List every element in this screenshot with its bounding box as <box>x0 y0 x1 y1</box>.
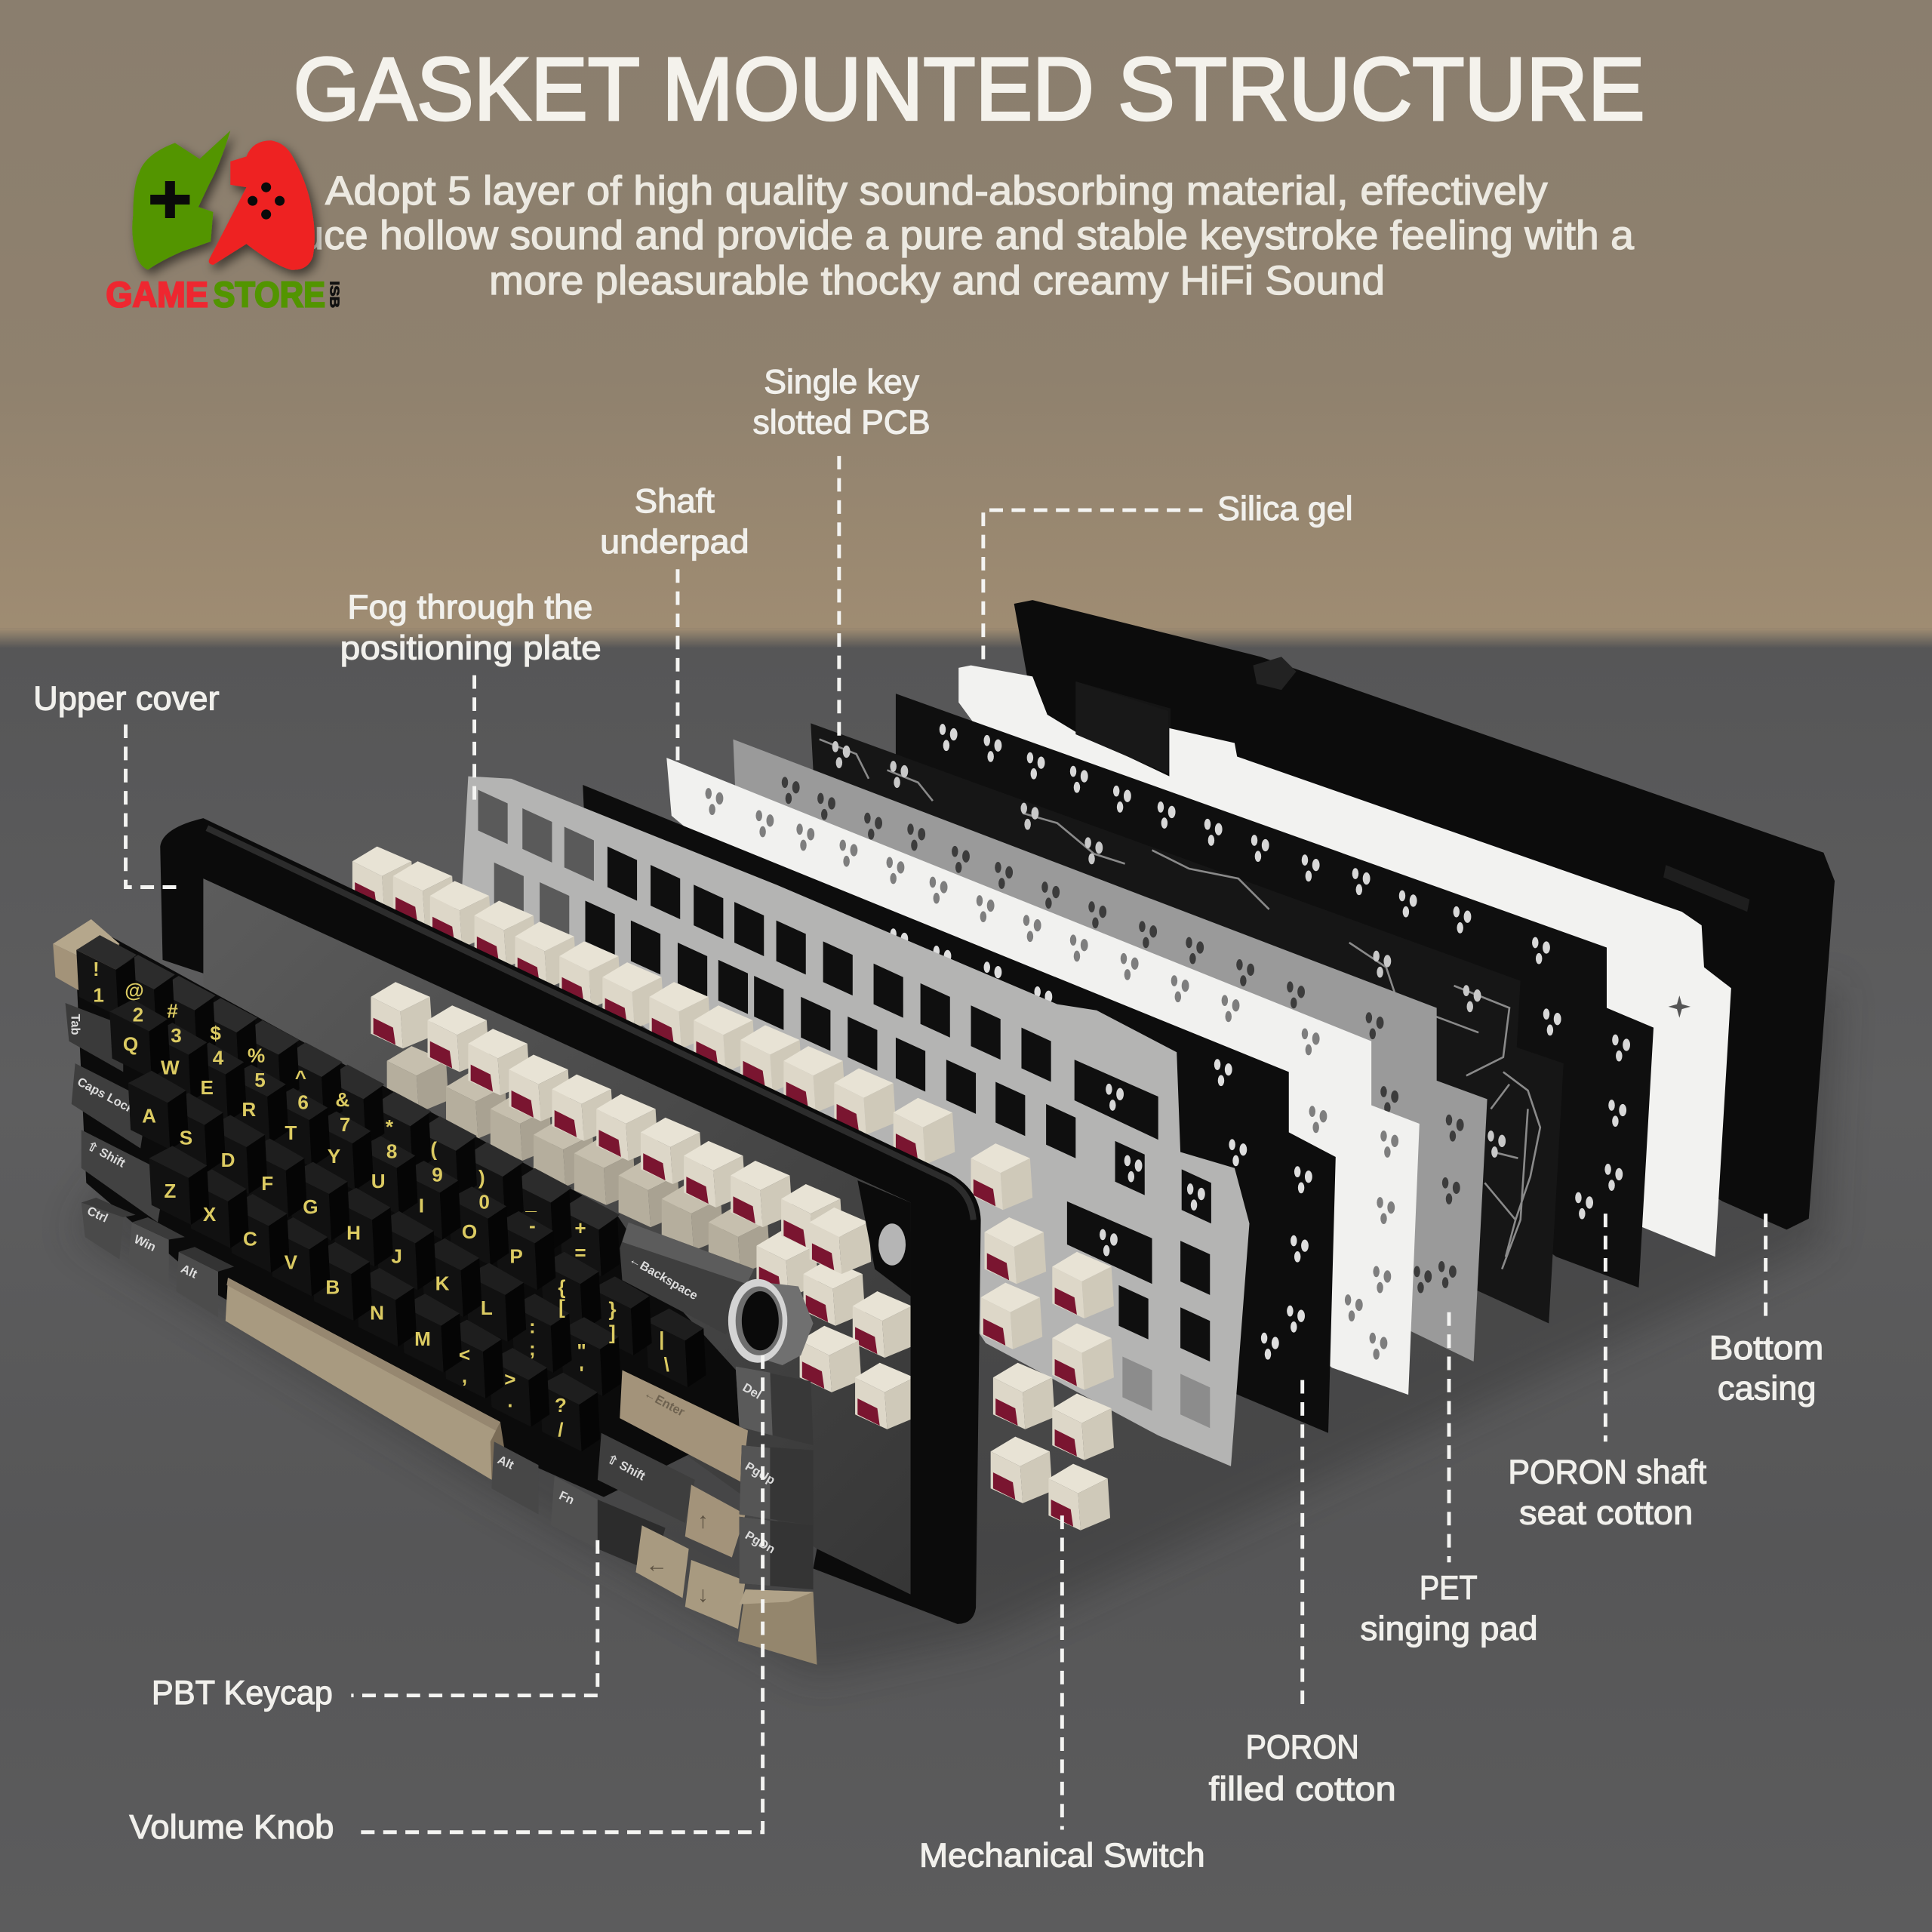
keycap legends: O <box>462 1220 477 1243</box>
keycap legends: 3 <box>171 1024 182 1047</box>
key: Caps Lock <box>72 1063 148 1149</box>
label: PORON filled cotton: PORON <box>1246 1729 1359 1766</box>
key: arrow left <box>635 1525 689 1598</box>
key: arrow up <box>685 1484 746 1558</box>
keycap legends: B <box>325 1275 340 1298</box>
key: Ctrl: Ctrl <box>85 1204 110 1226</box>
label: Single key slotted PCB: Single key <box>764 364 919 401</box>
keycap legends: 6 <box>297 1091 309 1113</box>
silica gel mark <box>1669 995 1690 1018</box>
upper cover see-through opening <box>203 878 911 1595</box>
label: Fog through the positioning plate: Fog through the <box>347 589 592 626</box>
label: PORON shaft seat cotton <box>1508 1214 1706 1532</box>
keycap legends: C <box>243 1228 257 1251</box>
keycap legends: H <box>346 1221 361 1244</box>
keycap legends: + <box>574 1217 586 1239</box>
frame top highlight <box>207 828 974 1220</box>
keycap legends: { <box>558 1275 566 1298</box>
key: Win <box>128 1217 185 1289</box>
key: left Alt <box>176 1247 234 1317</box>
key: Tab: Tab <box>69 1014 82 1035</box>
keycap legends: = <box>574 1241 586 1264</box>
key: Page Down <box>740 1517 814 1589</box>
keycap legends: $ <box>210 1022 221 1044</box>
key: Enter <box>620 1371 748 1482</box>
key: arrow up: ↑ <box>697 1508 709 1533</box>
keycap legends: N <box>370 1302 384 1324</box>
key: Backspace <box>620 1223 754 1334</box>
keycap legends: & <box>335 1088 349 1111</box>
label: PET singing pad: singing pad <box>1360 1611 1538 1647</box>
switches: muted row <box>387 1046 917 1429</box>
key: right Alt <box>491 1441 538 1515</box>
keycap legends: > <box>504 1368 516 1391</box>
label: Upper cover <box>33 680 220 888</box>
layer: positioning plate <box>462 777 1250 1466</box>
plate stabilizer cutouts <box>1067 1060 1158 1284</box>
logo wordmark: STORE <box>213 275 325 315</box>
key: Backspace: ←Backspace <box>627 1253 700 1303</box>
keycap legends: < <box>459 1343 470 1366</box>
keycap legends: W <box>161 1057 180 1079</box>
keycap legends: U <box>371 1170 386 1192</box>
keycap legends: # <box>167 1000 178 1023</box>
logo wordmark: GAME <box>106 275 208 315</box>
frame round hole <box>878 1223 906 1266</box>
keycap legends: . <box>507 1389 513 1411</box>
key: right Alt: Alt <box>495 1453 516 1472</box>
key: Page Down: PgDn <box>743 1528 777 1556</box>
keycap legends: 7 <box>340 1113 350 1136</box>
label: Fog through the positioning plate <box>340 589 601 801</box>
logo cross <box>150 181 189 218</box>
label: Bottom casing: casing <box>1718 1371 1817 1407</box>
keycap legends: D <box>221 1149 235 1171</box>
keycap legends: V <box>285 1251 298 1274</box>
keycap legends: } <box>608 1298 617 1321</box>
logo wordmark: ISB <box>328 281 343 308</box>
ASDF row keys <box>128 1071 621 1396</box>
keycap legends: K <box>435 1272 450 1294</box>
keycap legends: I <box>419 1195 424 1217</box>
PCB traces <box>820 740 1540 1269</box>
label: Bottom casing: Bottom <box>1709 1330 1823 1367</box>
keycap legends: E <box>201 1076 214 1099</box>
keycap legends: 1 <box>93 983 104 1006</box>
keycap legends: _ <box>525 1192 537 1214</box>
keycap legends: 5 <box>254 1069 266 1091</box>
keyboard keycaps <box>53 919 817 1665</box>
keycap legends <box>93 958 670 1441</box>
switches: middle row <box>371 982 871 1274</box>
casing knob <box>1253 657 1297 690</box>
keycap legends: Y <box>328 1145 340 1168</box>
keycap legends: 8 <box>386 1140 397 1163</box>
layer: shaft underpad <box>666 758 1420 1395</box>
label: PET singing pad <box>1360 1312 1538 1647</box>
keycap legends: ; <box>529 1337 536 1360</box>
keycap legends: T <box>285 1121 297 1144</box>
layer: PET singing pad <box>733 740 1487 1361</box>
background: wall <box>0 0 1932 629</box>
keycap legends: L <box>481 1297 493 1319</box>
layer: bottom casing <box>1014 600 1835 1229</box>
label: PORON filled cotton: filled cotton <box>1209 1770 1396 1807</box>
layer: single key slotted PCB <box>811 723 1564 1323</box>
key: arrow down <box>685 1560 746 1629</box>
title: GASKET MOUNTED STRUCTURE <box>294 39 1645 138</box>
label: Fog through the positioning plate: positioning plate <box>340 629 601 666</box>
keycap legends: @ <box>125 979 144 1001</box>
keycap legends: ^ <box>295 1066 306 1089</box>
logo wordmark <box>106 275 343 315</box>
plate keyholes <box>478 790 594 937</box>
keycap legends: - <box>529 1214 536 1237</box>
layer: PORON shaft seat cotton <box>896 694 1654 1287</box>
keycap legends: ] <box>609 1321 616 1344</box>
keycap legends: " <box>577 1340 586 1362</box>
layer: silica gel <box>958 666 1731 1257</box>
keyboard backing mass <box>76 937 740 1497</box>
keycap legends: Q <box>123 1033 138 1056</box>
label: Bottom casing <box>1709 1214 1823 1407</box>
keycap legends: M <box>414 1327 431 1350</box>
QWERTY row keys <box>109 999 706 1387</box>
label: PBT Keycap <box>152 1540 598 1712</box>
label: Volume Knob: Volume Knob <box>129 1809 334 1846</box>
volume knob <box>728 1279 814 1365</box>
keycap legends: ? <box>555 1394 567 1417</box>
keycap legends: X <box>203 1203 217 1226</box>
keycap legends: | <box>659 1327 664 1350</box>
number row keys <box>76 935 620 1276</box>
description text: more pleasurable thocky and creamy HiFi Sound <box>489 258 1385 303</box>
key: Fn: Fn <box>557 1489 577 1507</box>
key: right Shift <box>598 1433 695 1523</box>
logo: Game Store ISB <box>106 131 343 315</box>
keycap legends: 4 <box>213 1047 224 1069</box>
keycap legends: Z <box>164 1180 176 1202</box>
switches: top row <box>352 847 955 1164</box>
keycap legends: P <box>509 1244 523 1267</box>
label: Silica gel: Silica gel <box>1217 491 1353 528</box>
background: horizon blend <box>0 629 1932 648</box>
keycap legends: A <box>142 1104 156 1127</box>
label: Upper cover: Upper cover <box>33 680 220 717</box>
label: Single key slotted PCB: slotted PCB <box>753 405 931 441</box>
key: spacebar <box>226 1278 505 1480</box>
keycap legends: ( <box>430 1137 437 1160</box>
frame corner bracket <box>857 1180 911 1297</box>
keycap legends: ) <box>478 1166 485 1189</box>
dots seen through plate holes <box>1100 1084 1205 1256</box>
description text <box>300 168 1634 303</box>
keycap legends: J <box>391 1244 402 1267</box>
key: Page Up <box>740 1445 814 1525</box>
key: Ctrl <box>82 1198 136 1260</box>
switches: right column <box>971 1143 1114 1531</box>
keycap legends: [ <box>558 1295 565 1318</box>
key: Caps Lock: Caps Lock <box>75 1075 137 1116</box>
keycap legends: : <box>529 1315 536 1338</box>
keycap legends: * <box>386 1115 394 1138</box>
logo icon: split controller <box>132 131 315 270</box>
keycap legends: ! <box>93 958 100 980</box>
keycap legends: G <box>303 1195 318 1218</box>
layer: PORON filled cotton <box>583 785 1336 1433</box>
keycap legends: 0 <box>478 1191 490 1214</box>
label: Shaft underpad: Shaft <box>635 483 715 520</box>
key: arrow down: ↓ <box>697 1582 709 1607</box>
label: Shaft underpad <box>600 483 749 760</box>
label: PORON shaft seat cotton: PORON shaft <box>1508 1454 1706 1491</box>
key: left Shift: ⇧ Shift <box>85 1139 128 1171</box>
key: Win: Win <box>132 1232 158 1254</box>
ZXCV row keys <box>149 1146 600 1451</box>
description text: uce hollow sound and provide a pure and stable keystroke feeling with a <box>300 213 1634 258</box>
label: Mechanical Switch: Mechanical Switch <box>919 1837 1205 1874</box>
keycap legends: R <box>242 1098 256 1121</box>
keycap legends: / <box>558 1419 563 1441</box>
key: Delete <box>736 1367 814 1445</box>
upper cover frame <box>160 818 981 1624</box>
label: Shaft underpad: underpad <box>600 524 749 561</box>
key: Tab <box>66 1003 123 1072</box>
key: Fn <box>551 1476 598 1549</box>
label: Single key slotted PCB <box>753 364 931 742</box>
key: left Alt: Alt <box>179 1262 200 1281</box>
keycap legends: ' <box>580 1362 584 1385</box>
keycap legends: \ <box>664 1353 670 1376</box>
description text: Adopt 5 layer of high quality sound-absorbing material, effectively <box>325 168 1548 214</box>
label: PORON filled cotton <box>1209 1380 1396 1807</box>
label: Silica gel <box>983 491 1353 668</box>
label: PET singing pad: PET <box>1420 1570 1478 1607</box>
keycap legends: , <box>462 1364 467 1387</box>
label: PBT Keycap: PBT Keycap <box>152 1675 333 1712</box>
key: Enter: ←Enter <box>641 1386 688 1420</box>
key: spare dark <box>598 1500 666 1572</box>
keycap legends: 2 <box>133 1003 143 1026</box>
background: floor <box>0 648 1932 1932</box>
keycap legends: % <box>248 1044 265 1066</box>
key: Delete: Del <box>740 1381 764 1402</box>
floor shadow <box>74 986 1836 1675</box>
keycap legends: F <box>261 1172 273 1195</box>
key: Page Up: PgUp <box>743 1460 777 1487</box>
key: arrow left: ← <box>646 1552 668 1577</box>
keycap legends: S <box>180 1127 192 1149</box>
label: Volume Knob <box>129 1355 763 1846</box>
label: PORON shaft seat cotton: seat cotton <box>1519 1495 1693 1532</box>
key: arrow right <box>738 1589 817 1665</box>
key: right Shift: ⇧ Shift <box>605 1452 648 1484</box>
key: left Shift <box>82 1130 166 1223</box>
logo buttons <box>248 183 285 220</box>
ESC key <box>53 919 119 992</box>
keycap legends: 9 <box>432 1164 443 1186</box>
